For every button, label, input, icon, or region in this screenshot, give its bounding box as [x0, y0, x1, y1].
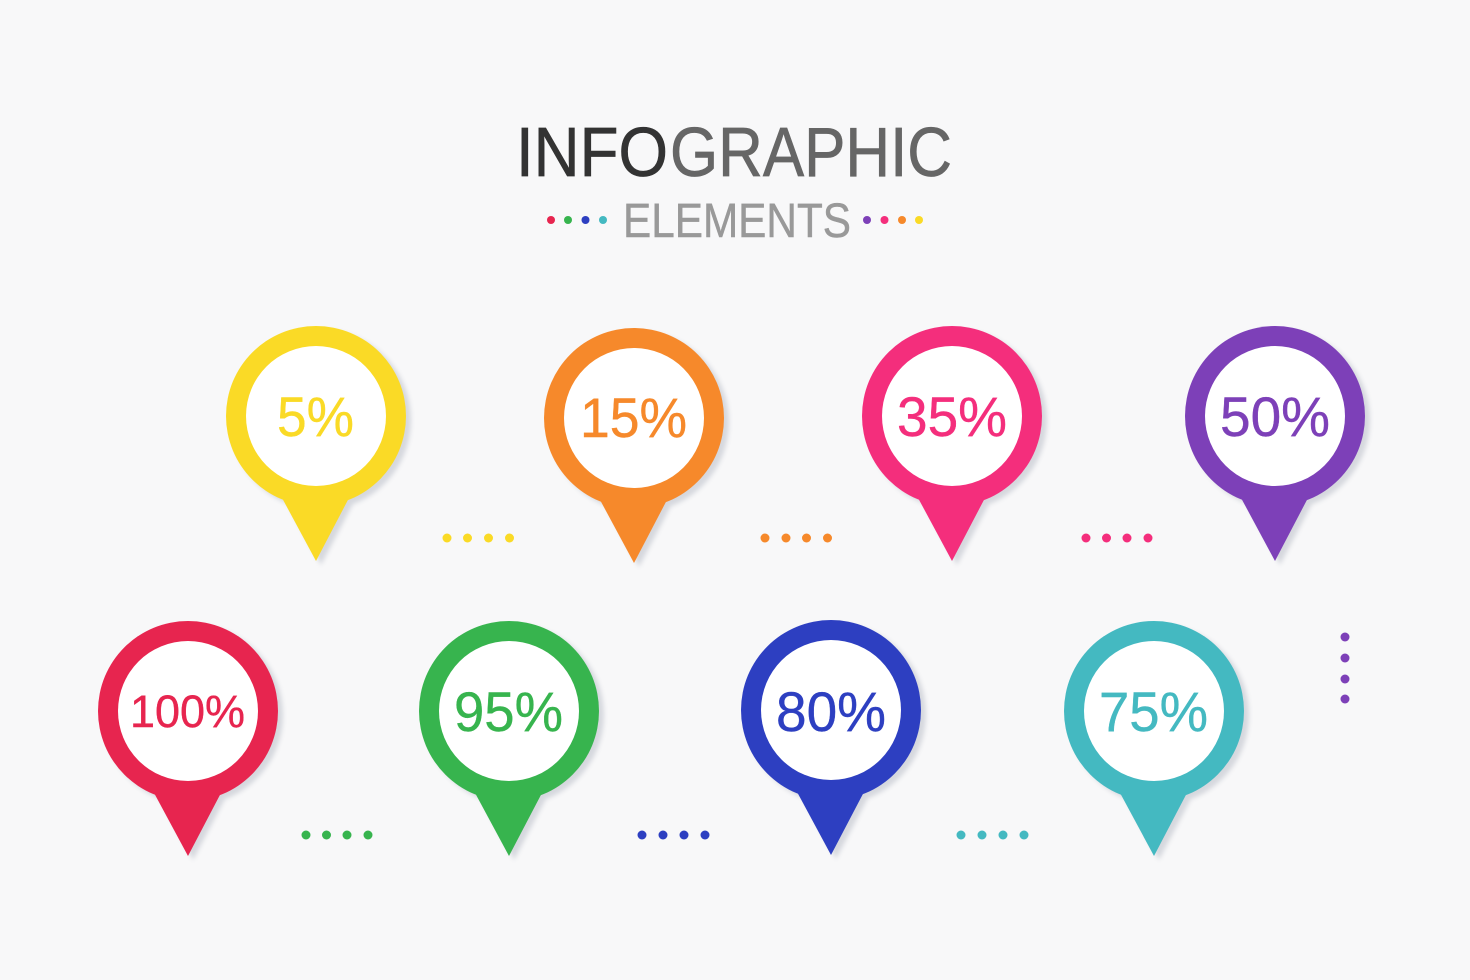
subtitle: ELEMENTS — [623, 195, 851, 248]
title — [516, 113, 952, 191]
pin: 35%: 35% — [897, 385, 1007, 448]
dots: blue — [638, 830, 710, 840]
pin: 75%: 75% — [1099, 680, 1208, 743]
dots: pink — [1082, 534, 1152, 542]
pin: 80%: 80% — [776, 680, 886, 743]
title dots left — [547, 216, 607, 224]
pin: 35% — [862, 326, 1047, 565]
pin: 5% — [226, 326, 411, 565]
pin: 50%: 50% — [1220, 385, 1330, 448]
pin: 5%: 5% — [277, 385, 354, 448]
dots: purple vertical — [1340, 632, 1350, 704]
title: INFO — [516, 113, 668, 191]
dots: orange — [760, 534, 832, 542]
pin: 15%: 15% — [580, 386, 687, 449]
dots: yellow — [442, 534, 514, 542]
pin: 100% — [98, 621, 283, 860]
pin: 100%: 100% — [130, 686, 245, 737]
dots: green — [302, 830, 372, 840]
pin: 75% — [1064, 621, 1249, 860]
pin: 50% — [1185, 326, 1370, 565]
dots: teal — [956, 830, 1028, 840]
pin: 95% — [419, 621, 604, 860]
pin: 95%: 95% — [454, 680, 563, 743]
pin: 80% — [741, 620, 926, 859]
title: GRAPHIC — [670, 113, 952, 191]
pin: 15% — [544, 328, 729, 567]
title dots right — [863, 216, 923, 224]
